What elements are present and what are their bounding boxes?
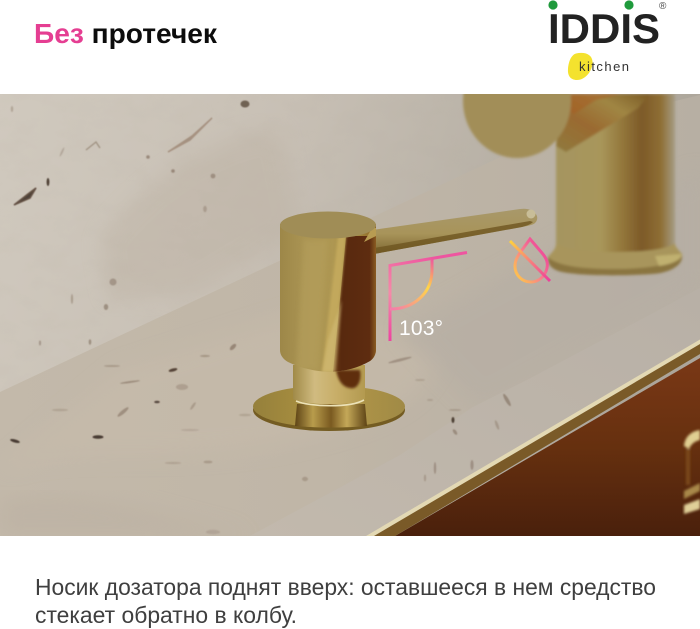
dispenser neck <box>293 365 365 406</box>
dispenser top cap <box>280 212 376 238</box>
blurred faucet <box>463 44 682 275</box>
stone pits <box>10 100 512 534</box>
stone wall <box>0 94 700 536</box>
gold trim <box>366 340 700 536</box>
angle icon 103 degrees: 103° <box>399 317 443 340</box>
copper sink panel <box>395 358 700 536</box>
logo: IDDIS kitchen: kitchen <box>579 59 629 74</box>
countertop surface <box>0 95 700 536</box>
panel: product photo <box>0 94 700 536</box>
logo: IDDIS kitchen: IDDIS <box>548 5 660 52</box>
caption text <box>35 574 656 628</box>
title: Без протечек <box>34 18 218 49</box>
caption text: Носик дозатора поднят вверх: оставшееся в нем средство <box>35 574 656 600</box>
no-drip drop icon <box>510 239 550 282</box>
caption text: стекает обратно в колбу. <box>35 602 297 628</box>
logo: IDDIS kitchen <box>548 0 667 80</box>
dispenser spout <box>372 209 537 254</box>
soap dispenser <box>253 209 537 431</box>
countertop front edge <box>250 288 700 536</box>
right sink handle <box>684 430 700 514</box>
dispenser body <box>280 224 376 372</box>
dispenser base plate <box>253 386 405 431</box>
logo: IDDIS kitchen: ® <box>659 1 667 12</box>
angle icon 103 degrees <box>390 252 467 341</box>
